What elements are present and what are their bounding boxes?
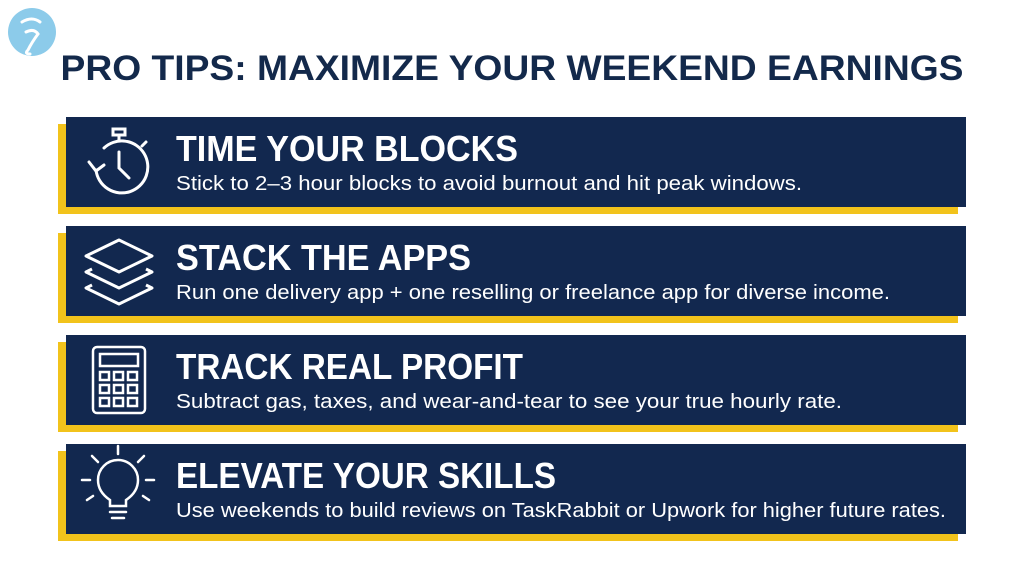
heading: ELEVATE YOUR SKILLS xyxy=(176,455,556,496)
icon: stopwatch xyxy=(89,129,148,193)
panel: elevate your skills xyxy=(58,444,966,541)
panel: time your blocks xyxy=(58,117,966,214)
heading: TIME YOUR BLOCKS xyxy=(176,128,518,169)
heading: STACK THE APPS xyxy=(176,237,471,278)
heading: TRACK REAL PROFIT xyxy=(176,346,523,387)
icon: calculator xyxy=(93,347,145,413)
icon: lightbulb xyxy=(82,446,154,518)
text: Subtract gas, taxes, and wear-and-tear to see your true hourly rate. xyxy=(176,391,842,413)
text: Use weekends to build reviews on TaskRabbit or Upwork for higher future rates. xyxy=(176,500,946,522)
panel: stack the apps xyxy=(58,226,966,323)
panel: track real profit xyxy=(58,335,966,432)
text: Stick to 2–3 hour blocks to avoid burnout and hit peak windows. xyxy=(176,173,802,195)
text: Run one delivery app + one reselling or freelance app for diverse income. xyxy=(176,282,890,304)
title: PRO TIPS: MAXIMIZE YOUR WEEKEND EARNINGS xyxy=(60,49,963,88)
logo xyxy=(8,8,56,56)
icon: layers xyxy=(86,240,152,304)
